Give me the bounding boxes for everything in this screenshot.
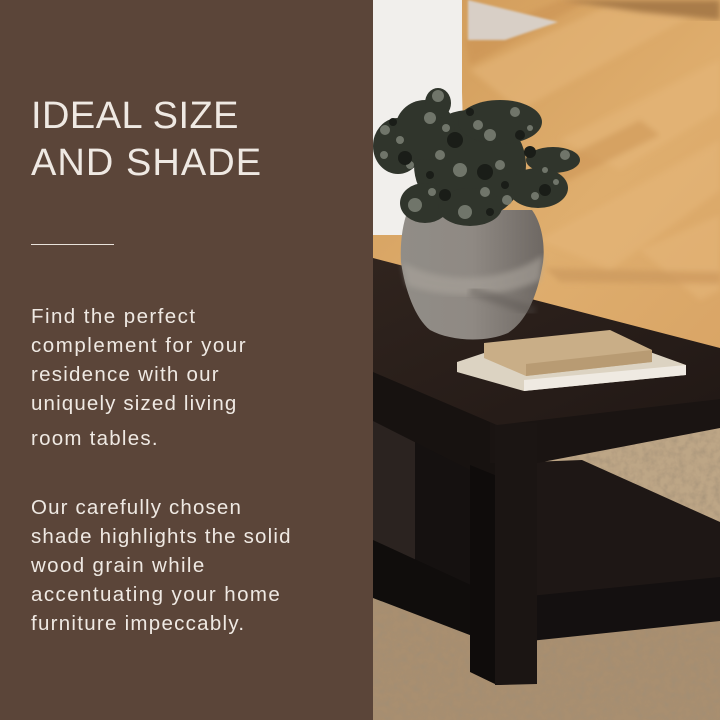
text block: second paragraph: shade highlights the solid	[31, 525, 292, 548]
wall	[373, 0, 466, 235]
table legs	[470, 465, 497, 685]
text block: first paragraph: uniquely sized living	[31, 392, 237, 415]
heading	[31, 95, 262, 184]
text block: second paragraph: wood grain while	[31, 554, 206, 577]
text block: first paragraph: room tables.	[31, 427, 159, 450]
heading: IDEAL SIZE	[31, 95, 239, 137]
vase	[401, 210, 544, 339]
table shelf	[373, 415, 475, 590]
table	[373, 258, 720, 685]
plant	[373, 88, 580, 226]
divider rule	[31, 244, 114, 245]
text block: first paragraph	[31, 305, 247, 450]
text block: first paragraph: residence with our	[31, 363, 220, 386]
panel: text column	[0, 0, 373, 720]
table apron	[373, 368, 500, 480]
text block: second paragraph: Our carefully chosen	[31, 496, 242, 519]
photo: coffee table scene	[373, 0, 720, 720]
text block: first paragraph: Find the perfect	[31, 305, 196, 328]
heading: AND SHADE	[31, 142, 262, 184]
rug	[373, 395, 720, 720]
text block: second paragraph: accentuating your home	[31, 583, 281, 606]
table top	[373, 258, 720, 425]
books	[457, 330, 686, 391]
text block: second paragraph	[31, 496, 292, 635]
floor	[373, 0, 720, 350]
text block: first paragraph: complement for your	[31, 334, 247, 357]
text block: second paragraph: furniture impeccably.	[31, 612, 245, 635]
